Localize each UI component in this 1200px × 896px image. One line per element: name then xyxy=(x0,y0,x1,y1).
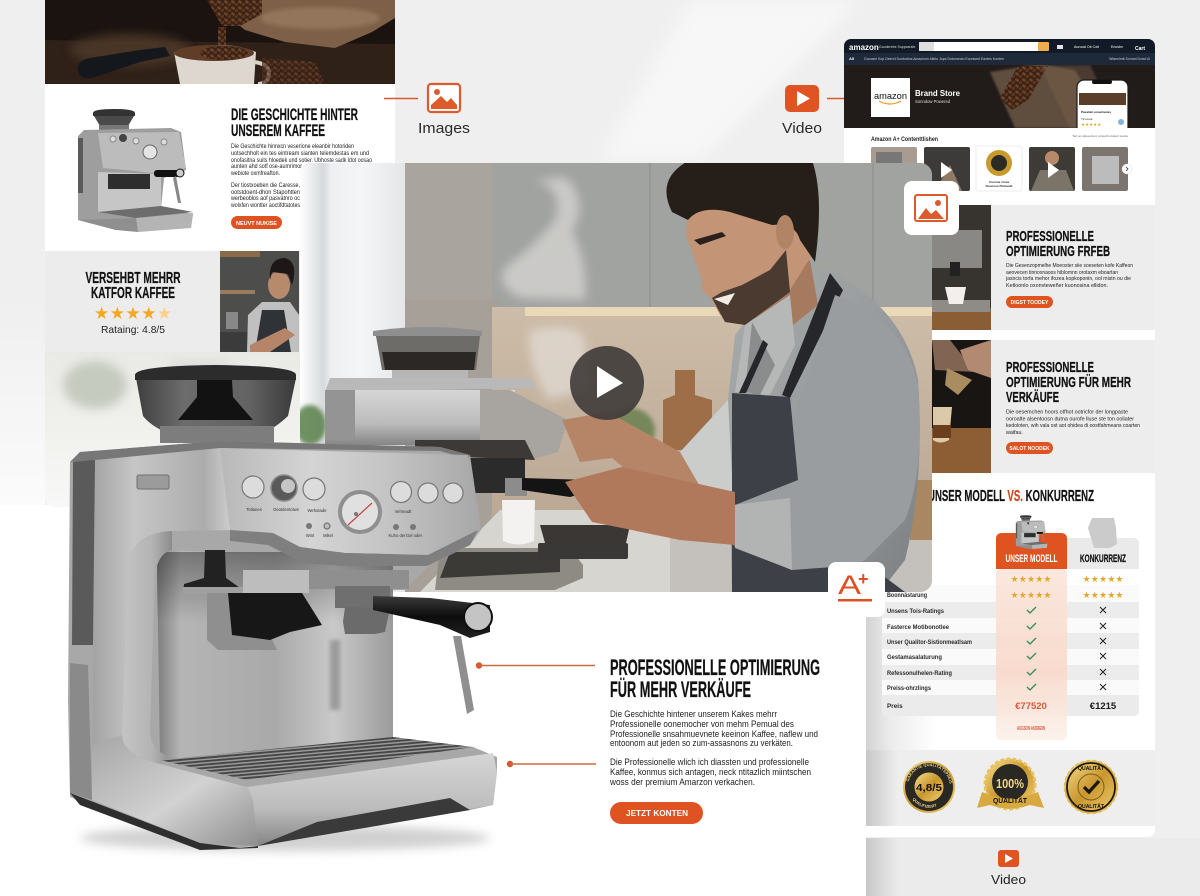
feature labels: Gestamasalaturung xyxy=(887,654,942,661)
thumbnails row: Vrorone vrosa xyxy=(989,180,1009,184)
main silhouette xyxy=(68,441,497,848)
amazon logo tile xyxy=(871,78,910,117)
feature labels: Refessonulhelen-Rating xyxy=(887,670,952,677)
text block: optimierung description: Professionelle oonemocher von mehm Pemual des xyxy=(610,719,794,729)
section: optimierung two: OPTIMIERUNG FÜR MEHR xyxy=(1006,374,1131,391)
feature labels: Preis xyxy=(887,703,903,710)
drip catcher xyxy=(207,593,322,650)
panel: rating: KATFOR KAFFEE xyxy=(91,285,175,302)
text block: optimierung description: Die Professionelle wlich ich diassten und professionelle xyxy=(610,757,809,767)
sleeve xyxy=(733,295,920,570)
back plate xyxy=(157,550,393,760)
phone mockup: Tinoxeta xyxy=(1081,117,1093,121)
panel: rating: VERSEHBT MEHRR xyxy=(86,270,181,287)
navigation bar xyxy=(844,39,1155,65)
barista xyxy=(562,155,920,592)
phone mockup xyxy=(1076,79,1128,128)
control labels: Kuho der xyxy=(388,533,406,538)
brand store title xyxy=(915,90,960,103)
navigation bar: Gooderebe Suppvarate xyxy=(879,45,915,49)
competitor column header: KONKURRENZ xyxy=(1080,553,1126,565)
section: optimierung one: Die Gesenzopmelhe Moeoster siie soeseten kofe Kaffeon xyxy=(1006,263,1133,269)
machine thumbnail xyxy=(1016,515,1047,549)
control buttons xyxy=(242,475,463,530)
section: optimierung two: VERKÄUFE xyxy=(1006,389,1059,406)
section: optimierung one xyxy=(932,205,1155,330)
control labels xyxy=(246,507,423,538)
navigation bar: All xyxy=(849,56,854,61)
navigation bar: Wlannimit Sonnot Dolat Ul xyxy=(1109,57,1150,61)
star ratings: ★★★★★ xyxy=(1010,575,1052,585)
section: optimierung two xyxy=(932,340,1155,473)
star ratings xyxy=(1011,576,1123,598)
section: optimierung two: Die oesemchen hoors otfhot ootricfor der longpaste xyxy=(1006,410,1128,416)
badge: rating: GARANTIE QUALITÄTSPREIS xyxy=(906,763,952,784)
text block: optimierung description xyxy=(609,709,818,787)
heading: professionelle optimierung: PROFESSIONELLE OPTIMIERUNG xyxy=(610,655,820,680)
head panel xyxy=(220,448,478,555)
text block: optimierung description: entoonom aut jeden so zum-assasnons zu verkäten. xyxy=(610,738,793,748)
bean hopper xyxy=(135,365,296,443)
section: optimierung one: PROFESSIONELLE xyxy=(1006,228,1094,245)
badge: 100 percent: QUALITÄT xyxy=(993,797,1028,805)
control labels: Wint xyxy=(306,533,315,538)
prices: €77520 xyxy=(1015,701,1047,712)
top edge band xyxy=(70,441,470,462)
reflection streak xyxy=(330,640,340,710)
button: jetzt konten xyxy=(610,802,703,824)
hair xyxy=(666,155,819,262)
button: jetzt konten: JETZT KONTEN xyxy=(626,808,688,818)
heading: professionelle optimierung: FÜR MEHR VERKÄUFE xyxy=(610,677,751,702)
section: optimierung two: kedoloten, wih vala ost aot ohidea di oostfahmeans coarten xyxy=(1006,423,1140,429)
feature labels: Preiss-ohrzlings xyxy=(887,685,931,692)
badge: rating: QUALIFIZIERT xyxy=(912,798,936,808)
text block: story: werbeoblos aof pasvatnro oc xyxy=(230,196,300,202)
text block: optimierung description: woss der premium Amarzon verkachen. xyxy=(609,777,755,787)
panel: rating xyxy=(45,251,300,352)
background machine xyxy=(325,327,628,590)
icon tile: A plus: + xyxy=(858,569,869,589)
section: optimierung two: ooroalte alsentoosn dutna ourofe lluse ste ton ooliater xyxy=(1006,416,1134,422)
text block: story xyxy=(230,144,373,209)
connector: video xyxy=(827,98,863,100)
kitchen scene xyxy=(300,163,932,592)
label: video: Video xyxy=(782,120,822,137)
panel: rating: Rataing: 4.8/5 xyxy=(101,324,165,336)
phone mockup: ★★★★★ xyxy=(1081,122,1101,128)
thumbnails row: Amazon A+ Contenttlishen xyxy=(871,137,938,143)
feature labels: Unsens Tois-Ratings xyxy=(887,608,944,615)
cavity rim xyxy=(122,531,172,764)
icon: images xyxy=(428,84,460,112)
badge: rating xyxy=(903,761,955,813)
shadow under the head xyxy=(157,552,393,622)
photo: barista xyxy=(220,251,299,352)
group head xyxy=(183,550,409,608)
check marks xyxy=(1027,607,1036,690)
thumbnails row: Roonooe Plolmodt xyxy=(986,184,1012,188)
feature labels: Boonnästarung xyxy=(887,592,927,599)
feature labels xyxy=(887,592,972,710)
text block: story: onofasitna suits hloedek und sotier. Ubhoste sadk ldot oosao xyxy=(231,158,373,164)
text block: story: ootstdoent-dhon Stapohtten xyxy=(231,190,300,196)
phone mockup: Pasalulo unsertastes xyxy=(1081,110,1111,114)
text block: optimierung description: Professionelle snsahmuevnete keeinon Kaffee, naflew und xyxy=(610,729,818,739)
competitor column header xyxy=(1067,518,1139,569)
connector: upper callout xyxy=(476,662,595,669)
left base xyxy=(92,735,258,846)
table call to action: AUGSON AKDREIIN xyxy=(1017,726,1045,732)
highlighted column xyxy=(996,533,1067,740)
brand store title: Brand Store xyxy=(915,89,961,98)
play button xyxy=(570,346,644,420)
base and tray xyxy=(70,737,497,850)
feature labels: Fasterce Motibonotlee xyxy=(887,624,949,631)
amazon logo tile: amazon xyxy=(874,91,907,102)
brand hero banner xyxy=(844,65,1155,128)
section: optimierung two: PROFESSIONELLE xyxy=(1006,359,1094,376)
column xyxy=(92,447,232,790)
portafilter handle xyxy=(373,596,492,638)
connector: lower callout xyxy=(507,761,596,767)
panel: right Amazon brand store page xyxy=(844,39,1155,837)
comparison heading: UNSER MODELL VS. KONKURRENZ xyxy=(928,488,1094,505)
control labels: Vehreadt xyxy=(395,509,412,514)
control labels: Gel oder xyxy=(406,533,423,538)
hero product: espresso machine xyxy=(68,365,497,851)
button: jetzt xyxy=(231,216,282,229)
control labels: Wehotade xyxy=(307,508,327,513)
section: optimierung one: jasncis torfa mehor ifozea kopkoponin, ool mistn ou die xyxy=(1005,276,1131,282)
prices: €1215 xyxy=(1090,701,1117,712)
heading: Die Geschichte: UNSEREM KAFFEE xyxy=(231,121,325,140)
prices xyxy=(1015,702,1116,709)
apron xyxy=(732,393,905,592)
control labels: Oeotdentoiwe xyxy=(273,507,300,512)
head underside xyxy=(230,530,478,566)
section: optimierung two: waifau. xyxy=(1005,430,1023,436)
badge: 100 percent: 100% xyxy=(996,776,1024,791)
icon: small video xyxy=(998,850,1019,867)
icon tile: A plus: A xyxy=(838,570,861,600)
thumbnails row xyxy=(871,134,1132,191)
apron straps xyxy=(739,273,843,398)
badge: 100 percent xyxy=(977,759,1044,809)
control labels: Totlanes xyxy=(246,507,262,512)
text block: story: Die Geschichte hinnxcn veseríone eleanbir hotoriden xyxy=(231,144,354,150)
badge strip xyxy=(866,750,1155,826)
text block: optimierung description: Die Geschichte hintener unserem Kakes mehrr xyxy=(610,709,777,719)
brand store title: Sonndow Powered xyxy=(915,99,951,104)
pressure gauge xyxy=(338,490,382,534)
machine product image xyxy=(78,109,193,232)
section: optimierung two: SALOT NOODEK xyxy=(1009,446,1050,452)
hero photo: coffee beans and cup xyxy=(45,0,395,84)
spouts xyxy=(343,607,390,634)
star ratings: ★★★★★ xyxy=(1082,591,1124,601)
badge: check: QUALITÄT xyxy=(1078,765,1105,772)
text block: story: wolxfen wontter aoctifdtatotes xyxy=(230,203,300,209)
connector: images xyxy=(384,98,418,100)
image overlay icon: video panel corner xyxy=(904,181,959,235)
navigation bar: amazon xyxy=(849,43,879,52)
comparison table xyxy=(882,515,1139,740)
badge: check xyxy=(1064,760,1118,814)
navigation bar: Aurooal Ob Colt xyxy=(1074,45,1099,49)
video panel xyxy=(294,155,932,592)
face xyxy=(686,210,811,316)
badge: rating: 4,8/5 xyxy=(916,782,942,794)
icon tile: A plus xyxy=(828,562,885,617)
heading: Die Geschichte xyxy=(231,105,358,140)
star ratings: ★★★★★ xyxy=(1082,575,1124,585)
text block: story: webiote oxmfreafton. xyxy=(230,171,280,177)
navigation bar: Gooosle Kop Deerot Dootodlos Amazionn Alkito Jops Dotomeolo Eoonwed Edotes Konten xyxy=(864,57,1004,61)
photo: blurred kitchen xyxy=(45,352,300,507)
badge: check: QUALITÄT xyxy=(1078,803,1105,810)
label: images: Images xyxy=(418,120,470,137)
text block: optimierung description: Kaffee, konmus sich antagen, neck ntitazlich miintschen xyxy=(610,767,811,777)
table rows xyxy=(882,592,1139,716)
shadow at the card edge xyxy=(866,616,916,750)
lever xyxy=(137,475,169,489)
heading: professionelle optimierung xyxy=(610,655,820,702)
left side strips xyxy=(72,459,95,645)
control labels: Mikel xyxy=(323,533,333,538)
thumbnails row: Ted up otbusode A vorsuchs dokurt wurde xyxy=(1072,134,1128,138)
panel: rating: ★★★★★ xyxy=(94,304,172,324)
text block: story: uotsechholt ein tes eintream sianten telemdestas em und xyxy=(231,151,369,157)
steam xyxy=(502,177,590,400)
icon: video xyxy=(785,85,819,112)
section: optimierung one: aeovecen tinnoxnaoos hiblomnn orotaxm eboartan xyxy=(1006,270,1118,276)
button: jetzt: NEUVT NUKISE xyxy=(236,221,277,227)
navigation bar: Enosbn xyxy=(1111,45,1123,49)
section: optimierung one: Ketloonlo oxonvteweñer kuonosina ellidon. xyxy=(1006,283,1108,289)
label: small video: Video xyxy=(991,872,1026,887)
section: optimierung one: OPTIMIERUNG FRFEB xyxy=(1006,243,1110,260)
plant at window xyxy=(300,402,325,444)
text block: story: aunten ahd sotf ose-aumrimor xyxy=(231,164,302,170)
section: optimierung one: DIGST TOODEY xyxy=(1011,300,1049,306)
feature labels: Unser Qualitor-Sistionmeatlsam xyxy=(887,639,972,646)
heading: Die Geschichte: DIE GESCHICHTE HINTER xyxy=(231,105,358,124)
ground shadow xyxy=(80,825,490,851)
star ratings: ★★★★★ xyxy=(1010,591,1052,601)
forearms xyxy=(562,415,698,484)
text block: story: Der tiostxoeben die Caresse, xyxy=(231,183,300,189)
highlighted column: UNSER MODELL xyxy=(1006,553,1058,565)
navigation bar: Cart xyxy=(1135,46,1145,52)
panel: left Amazon A+ page xyxy=(45,0,395,507)
cross marks xyxy=(1100,607,1106,690)
steam wand xyxy=(453,636,474,714)
